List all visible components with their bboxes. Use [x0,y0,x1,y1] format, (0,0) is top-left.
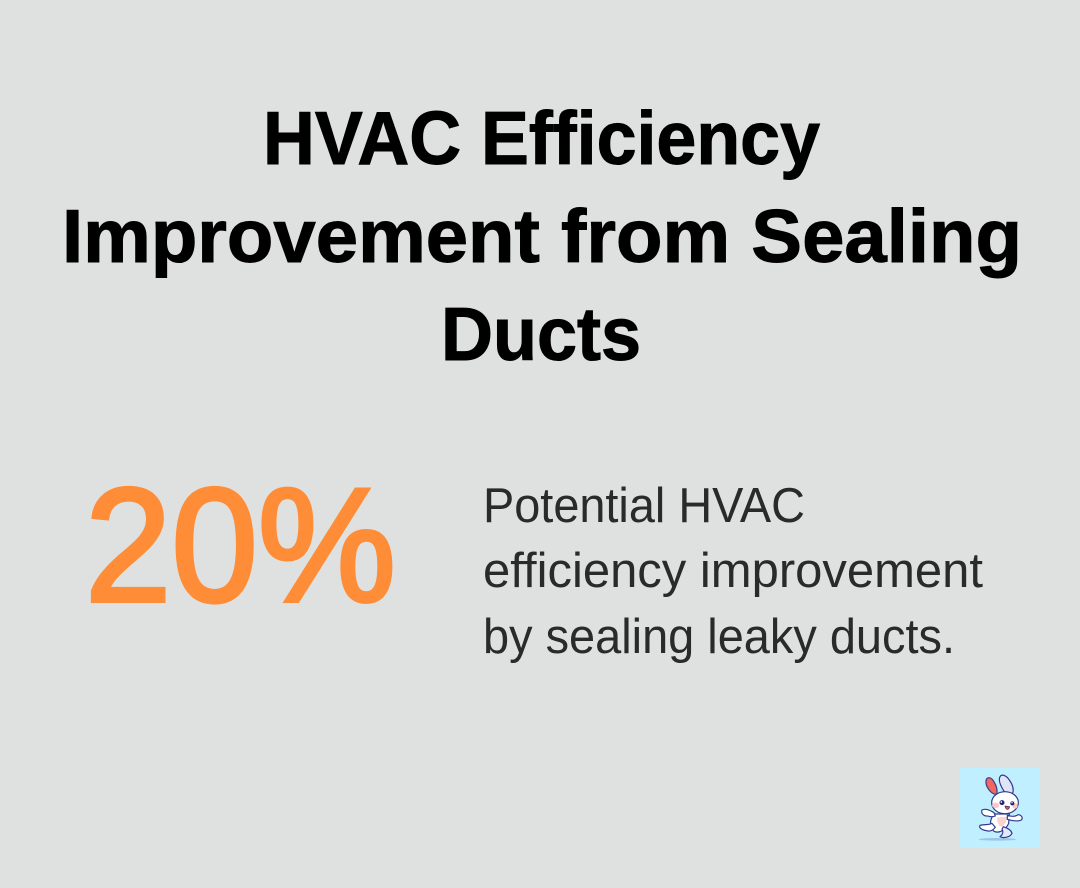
cheeks [992,803,999,808]
right arm [1007,815,1022,821]
left leg [980,823,995,831]
description text: Potential HVAC [483,479,805,533]
title: Ducts [441,292,641,376]
eyes [999,800,1004,805]
shadow [979,838,1016,841]
description text: efficiency improvement [483,544,983,598]
right leg [1000,827,1012,838]
title: Improvement from Sealing [62,194,1022,278]
description text: by sealing leaky ducts. [483,610,955,664]
title [62,96,1022,376]
statistic: 20%: 20% [85,455,396,636]
head [992,792,1018,814]
description text [483,479,983,664]
right ear [999,775,1013,793]
left ear [986,778,997,795]
title: HVAC Efficiency [263,96,820,180]
icon: running bunny logo [960,768,1040,848]
left arm [982,809,995,817]
body [990,814,1009,832]
mouth [1005,806,1010,809]
